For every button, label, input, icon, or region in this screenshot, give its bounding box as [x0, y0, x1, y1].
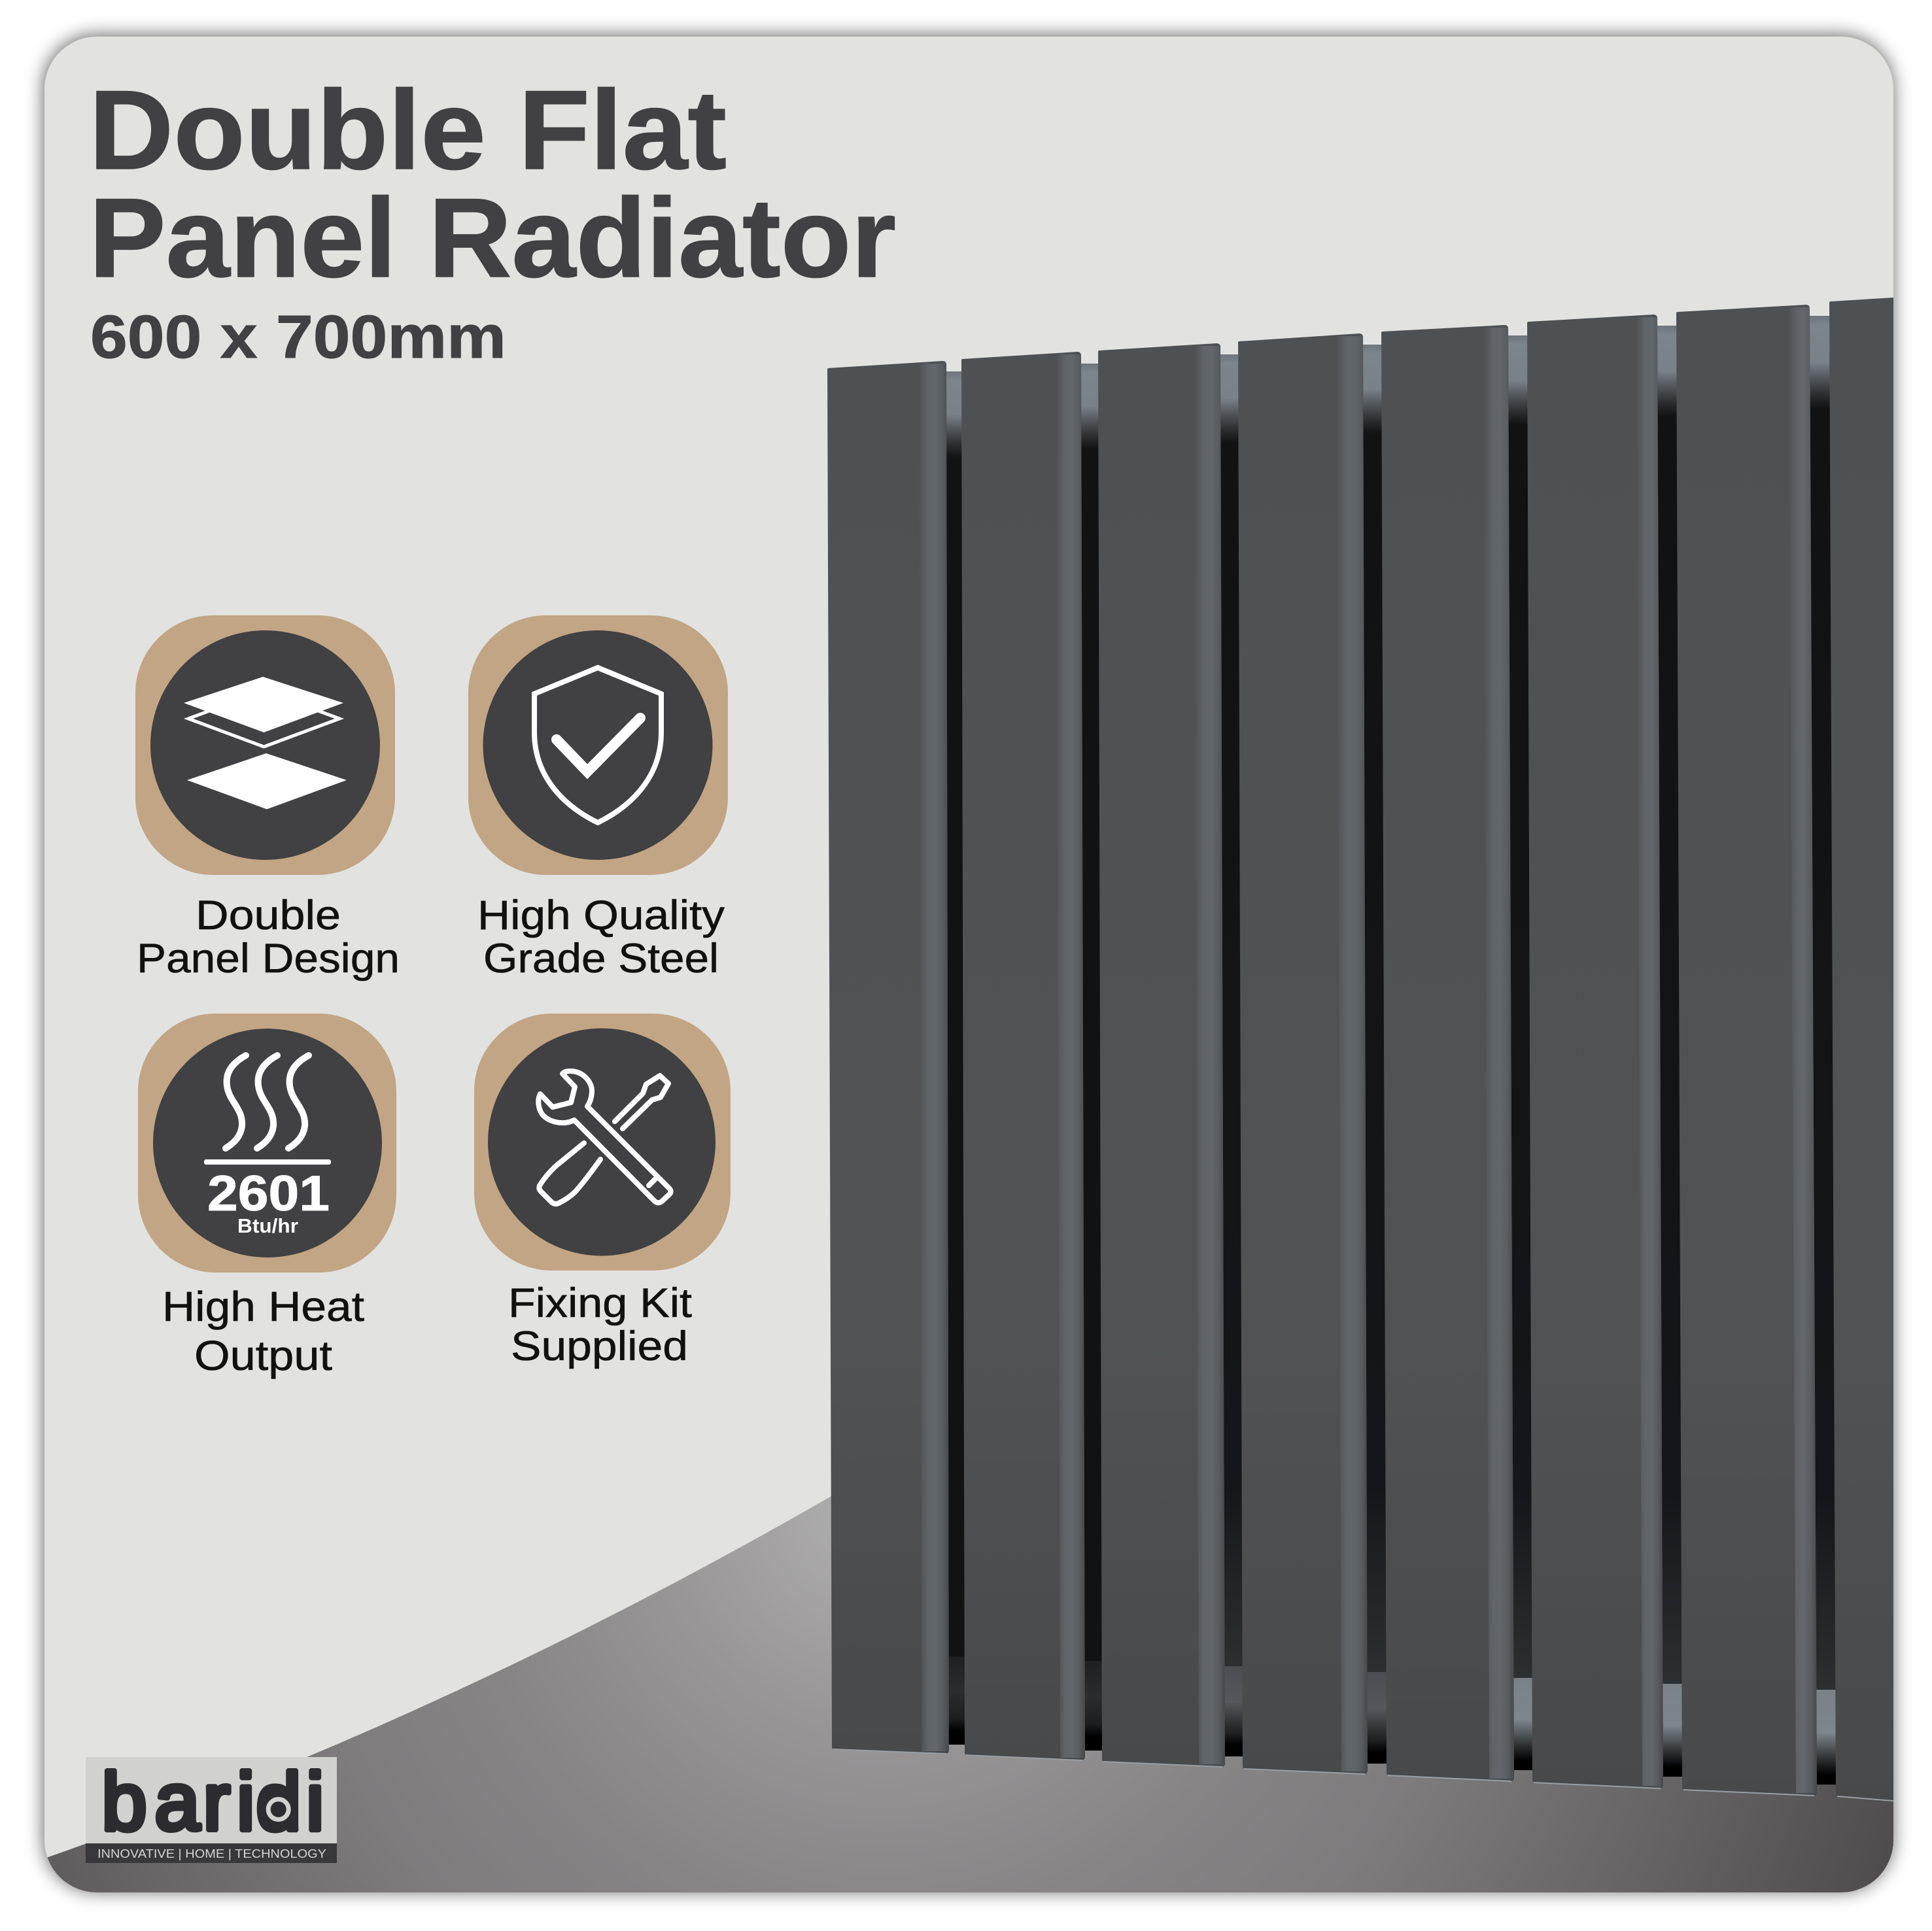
- radiator panel 4: [1238, 333, 1368, 1774]
- radiator panel 1: [827, 361, 949, 1754]
- gap 4 tubes: [1362, 345, 1388, 1764]
- badge background: [474, 1014, 731, 1271]
- feature: high heat output: [138, 1014, 396, 1379]
- label: high heat output: High Heat: [162, 1283, 364, 1330]
- radiator panel 8: [1829, 298, 1893, 1801]
- label: fixing kit supplied: [508, 1280, 693, 1369]
- gap 5 tubes: [1507, 335, 1534, 1770]
- gap 6 tubes: [1656, 326, 1683, 1777]
- logo ring on letter d: [261, 1792, 296, 1827]
- badge circle: [150, 630, 380, 860]
- label: high quality grade steel: [477, 893, 725, 982]
- radiator panel 6: [1527, 315, 1663, 1788]
- radiator: [827, 298, 1893, 1801]
- logo wordmark: baridi: [102, 1757, 324, 1847]
- divider line: [204, 1159, 331, 1165]
- logo tagline: INNOVATIVE | HOME | TECHNOLOGY: [97, 1847, 326, 1860]
- subtitle: dimensions: 600 x 700mm: [90, 303, 506, 371]
- title: Panel Radiator: [89, 175, 896, 301]
- floor wedge: [44, 1489, 1893, 1892]
- label: high quality grade steel: High Quality: [477, 893, 725, 938]
- badge background: [468, 615, 728, 875]
- icon: heat waves: [226, 1055, 309, 1148]
- heat output unit: Btu/hr: [237, 1214, 298, 1237]
- badge background: [135, 615, 395, 875]
- gap 1 tubes: [946, 371, 965, 1745]
- feature: fixing kit supplied: [474, 1014, 731, 1369]
- heat output value: 2601: [207, 1166, 330, 1222]
- title: [89, 67, 896, 301]
- radiator panel 3: [1098, 343, 1225, 1767]
- icon: wrench and screwdriver: [538, 1071, 671, 1204]
- gap 3 tubes: [1220, 354, 1243, 1756]
- badge background: [138, 1014, 396, 1273]
- radiator panel 7: [1676, 305, 1817, 1796]
- radiator panel 2: [961, 352, 1085, 1760]
- feature: double panel design: [135, 615, 400, 982]
- logo: baridi: [86, 1757, 337, 1863]
- label: fixing kit supplied: Fixing Kit: [508, 1280, 693, 1326]
- title: Double Flat: [89, 67, 727, 193]
- label: double panel design: Double: [196, 893, 341, 938]
- badge circle: [483, 630, 713, 860]
- icon: stacked layers: [184, 677, 347, 810]
- gap 7 tubes: [1808, 316, 1837, 1785]
- label: double panel design: [137, 893, 400, 982]
- label: high heat output: [162, 1283, 364, 1379]
- label: high quality grade steel: Grade Steel: [483, 936, 719, 982]
- label: fixing kit supplied: Supplied: [511, 1324, 688, 1369]
- feature: high quality grade steel: [468, 615, 728, 982]
- badge circle: [153, 1029, 382, 1257]
- gap 2 tubes: [1081, 364, 1102, 1751]
- radiator panel 5: [1381, 325, 1514, 1781]
- badge circle: [488, 1028, 716, 1256]
- icon: shield with check: [534, 668, 661, 823]
- label: double panel design: Panel Design: [137, 936, 400, 982]
- label: high heat output: Output: [194, 1332, 332, 1379]
